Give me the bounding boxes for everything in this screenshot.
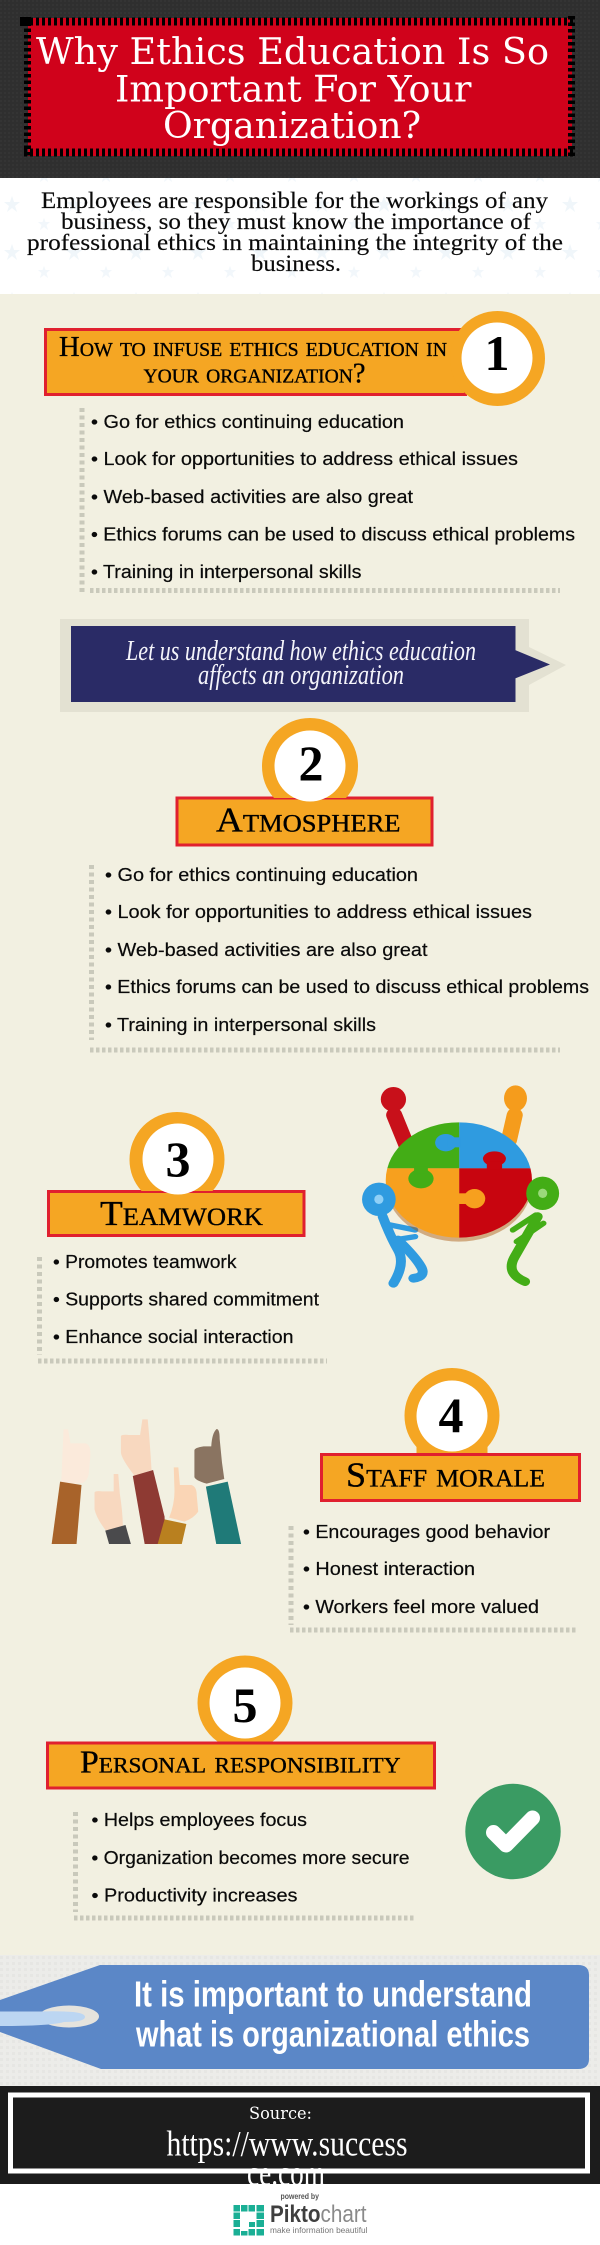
list 2	[90, 865, 589, 1050]
number badge 3	[130, 1112, 224, 1194]
heading bar 4: Staff morale	[346, 1456, 545, 1494]
footer: powered by Piktochart	[0, 2184, 600, 2245]
heading bar 3	[48, 1192, 304, 1236]
Piktochart tagline: make information beautiful	[270, 2225, 368, 2235]
list 1: • Ethics forums can be used to discuss ethical problems	[91, 524, 575, 544]
source panel	[0, 2086, 600, 2193]
intro text: business, so they must know the importance of	[61, 209, 531, 234]
list 1	[82, 408, 575, 592]
title: Organization?	[163, 106, 421, 147]
conclusion text	[134, 1974, 532, 2054]
list 4	[290, 1522, 578, 1630]
source url: https://www.success	[166, 2124, 408, 2164]
list 2: • Training in interpersonal skills	[105, 1015, 376, 1035]
icon: puzzle team	[362, 1085, 559, 1283]
number badge 5	[198, 1656, 292, 1742]
heading bar 2: Atmosphere	[216, 800, 400, 840]
list 3	[38, 1252, 327, 1361]
list 5: • Productivity increases	[92, 1886, 298, 1906]
heading bar 5: Personal responsibility	[80, 1744, 401, 1780]
callout text: Let us understand how ethics education	[125, 635, 476, 667]
heading bar 1	[46, 330, 466, 394]
list 4: • Workers feel more valued	[303, 1597, 539, 1617]
number badge 3: 3	[166, 1131, 190, 1187]
list 3: • Supports shared commitment	[53, 1290, 319, 1310]
number badge 1	[450, 311, 545, 406]
list 1: • Training in interpersonal skills	[91, 562, 362, 582]
list 5: • Organization becomes more secure	[92, 1848, 410, 1868]
section 1: how to infuse ethics education	[46, 311, 575, 592]
list 2: • Look for opportunities to address ethical issues	[105, 902, 532, 922]
list 3: • Enhance social interaction	[53, 1327, 294, 1347]
title: Why Ethics Education Is So	[36, 32, 549, 73]
callout text: affects an organization	[198, 659, 404, 691]
source url	[166, 2124, 408, 2193]
number badge 4	[404, 1368, 500, 1453]
powered by label: powered by	[280, 2191, 319, 2201]
icon: check mark	[465, 1784, 561, 1879]
heading bar 5	[48, 1743, 434, 1788]
list 5: • Helps employees focus	[92, 1810, 307, 1830]
list 3: • Promotes teamwork	[53, 1252, 238, 1272]
callout text	[125, 635, 476, 691]
callout ribbon	[60, 619, 566, 712]
icon: raised thumbs up	[52, 1419, 241, 1544]
heading bar 3: Teamwork	[100, 1194, 263, 1233]
number badge 5: 5	[232, 1677, 258, 1733]
list 1: • Web-based activities are also great	[91, 487, 413, 507]
section 3: teamwork	[38, 1085, 559, 1361]
section 4: staff morale	[52, 1368, 580, 1630]
intro text: Employees are responsible for the workings of any	[41, 188, 549, 213]
intro panel	[0, 178, 600, 294]
list 5	[74, 1810, 414, 1918]
source label: Source:	[249, 2104, 312, 2124]
blue tag	[0, 1965, 589, 2069]
conclusion band	[0, 1955, 600, 2086]
heading bar 4	[322, 1454, 580, 1500]
heading bar 2	[177, 798, 432, 845]
list 1: • Look for opportunities to address ethical issues	[91, 449, 518, 469]
icon: Piktochart logo	[234, 2205, 264, 2236]
section 2: atmosphere	[90, 718, 589, 1050]
list 2: • Web-based activities are also great	[105, 940, 428, 960]
title banner	[20, 16, 575, 156]
intro text: professional ethics in maintaining the integrity of the	[27, 230, 563, 255]
list 4: • Encourages good behavior	[303, 1522, 550, 1542]
number badge 2: 2	[298, 735, 324, 791]
heading bar 1: your organization?	[144, 358, 366, 390]
number badge 4: 4	[438, 1387, 464, 1443]
intro text: business.	[251, 251, 341, 276]
source url: ce.com	[247, 2153, 325, 2193]
list 4: • Honest interaction	[303, 1559, 475, 1579]
section 5: personal responsibility	[48, 1656, 561, 1918]
Piktochart wordmark: Piktochart	[270, 2201, 367, 2228]
number badge 2	[262, 718, 358, 802]
intro text	[27, 188, 563, 276]
list 1: • Go for ethics continuing education	[91, 412, 404, 432]
list 2: • Go for ethics continuing education	[105, 865, 418, 885]
header panel	[0, 0, 600, 178]
number badge 1: 1	[484, 325, 510, 381]
heading bar 1: How to infuse ethics education in	[59, 331, 447, 363]
title	[36, 32, 549, 147]
title: Important For Your	[115, 70, 472, 110]
list 2: • Ethics forums can be used to discuss ethical problems	[105, 977, 589, 997]
